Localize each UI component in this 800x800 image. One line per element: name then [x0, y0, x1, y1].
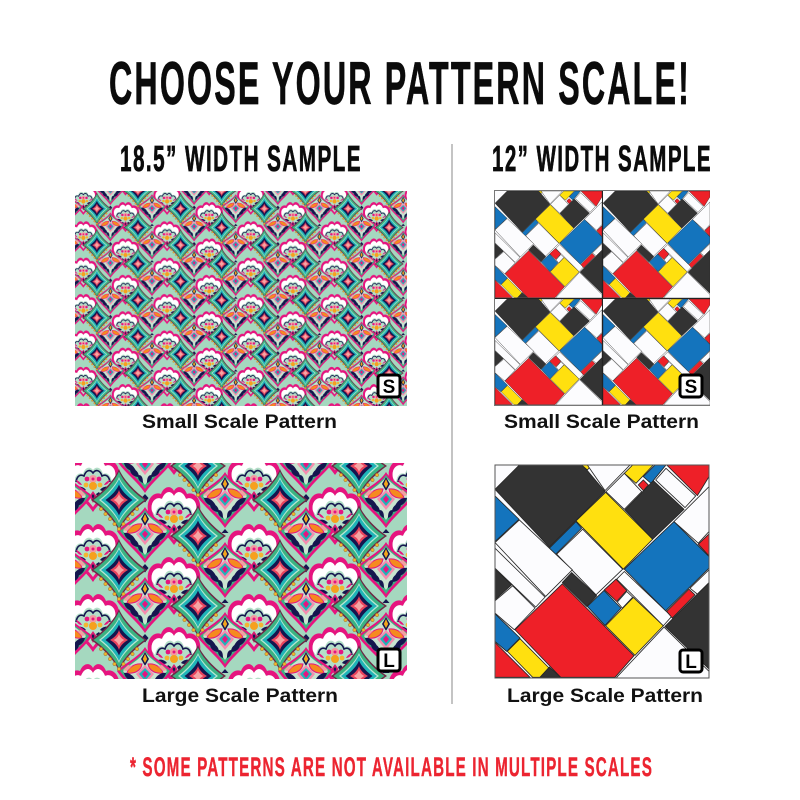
badge: L	[680, 650, 702, 673]
badge: S	[378, 375, 400, 398]
caption: geometric large scale: Large Scale Pattern	[507, 685, 703, 707]
heading: 18.5 inch width sample: 18.5” WIDTH SAMPLE	[120, 138, 362, 179]
caption: paisley small scale: Small Scale Pattern	[142, 411, 337, 433]
panel: paisley small scale sample	[75, 191, 407, 406]
caption: paisley large scale: Large Scale Pattern	[142, 685, 338, 707]
caption: geometric small scale: Small Scale Pattern	[504, 411, 699, 433]
badge: S: S	[685, 377, 697, 398]
column divider	[452, 144, 453, 704]
badge: S: S	[383, 377, 395, 398]
badge: L: L	[383, 651, 395, 672]
badge: S	[680, 375, 702, 398]
panel: geometric large scale sample	[495, 465, 709, 678]
badge: L	[378, 649, 400, 672]
badge: L: L	[685, 652, 697, 673]
panel: geometric small scale sample	[494, 190, 710, 406]
panel: paisley large scale sample	[75, 463, 407, 679]
